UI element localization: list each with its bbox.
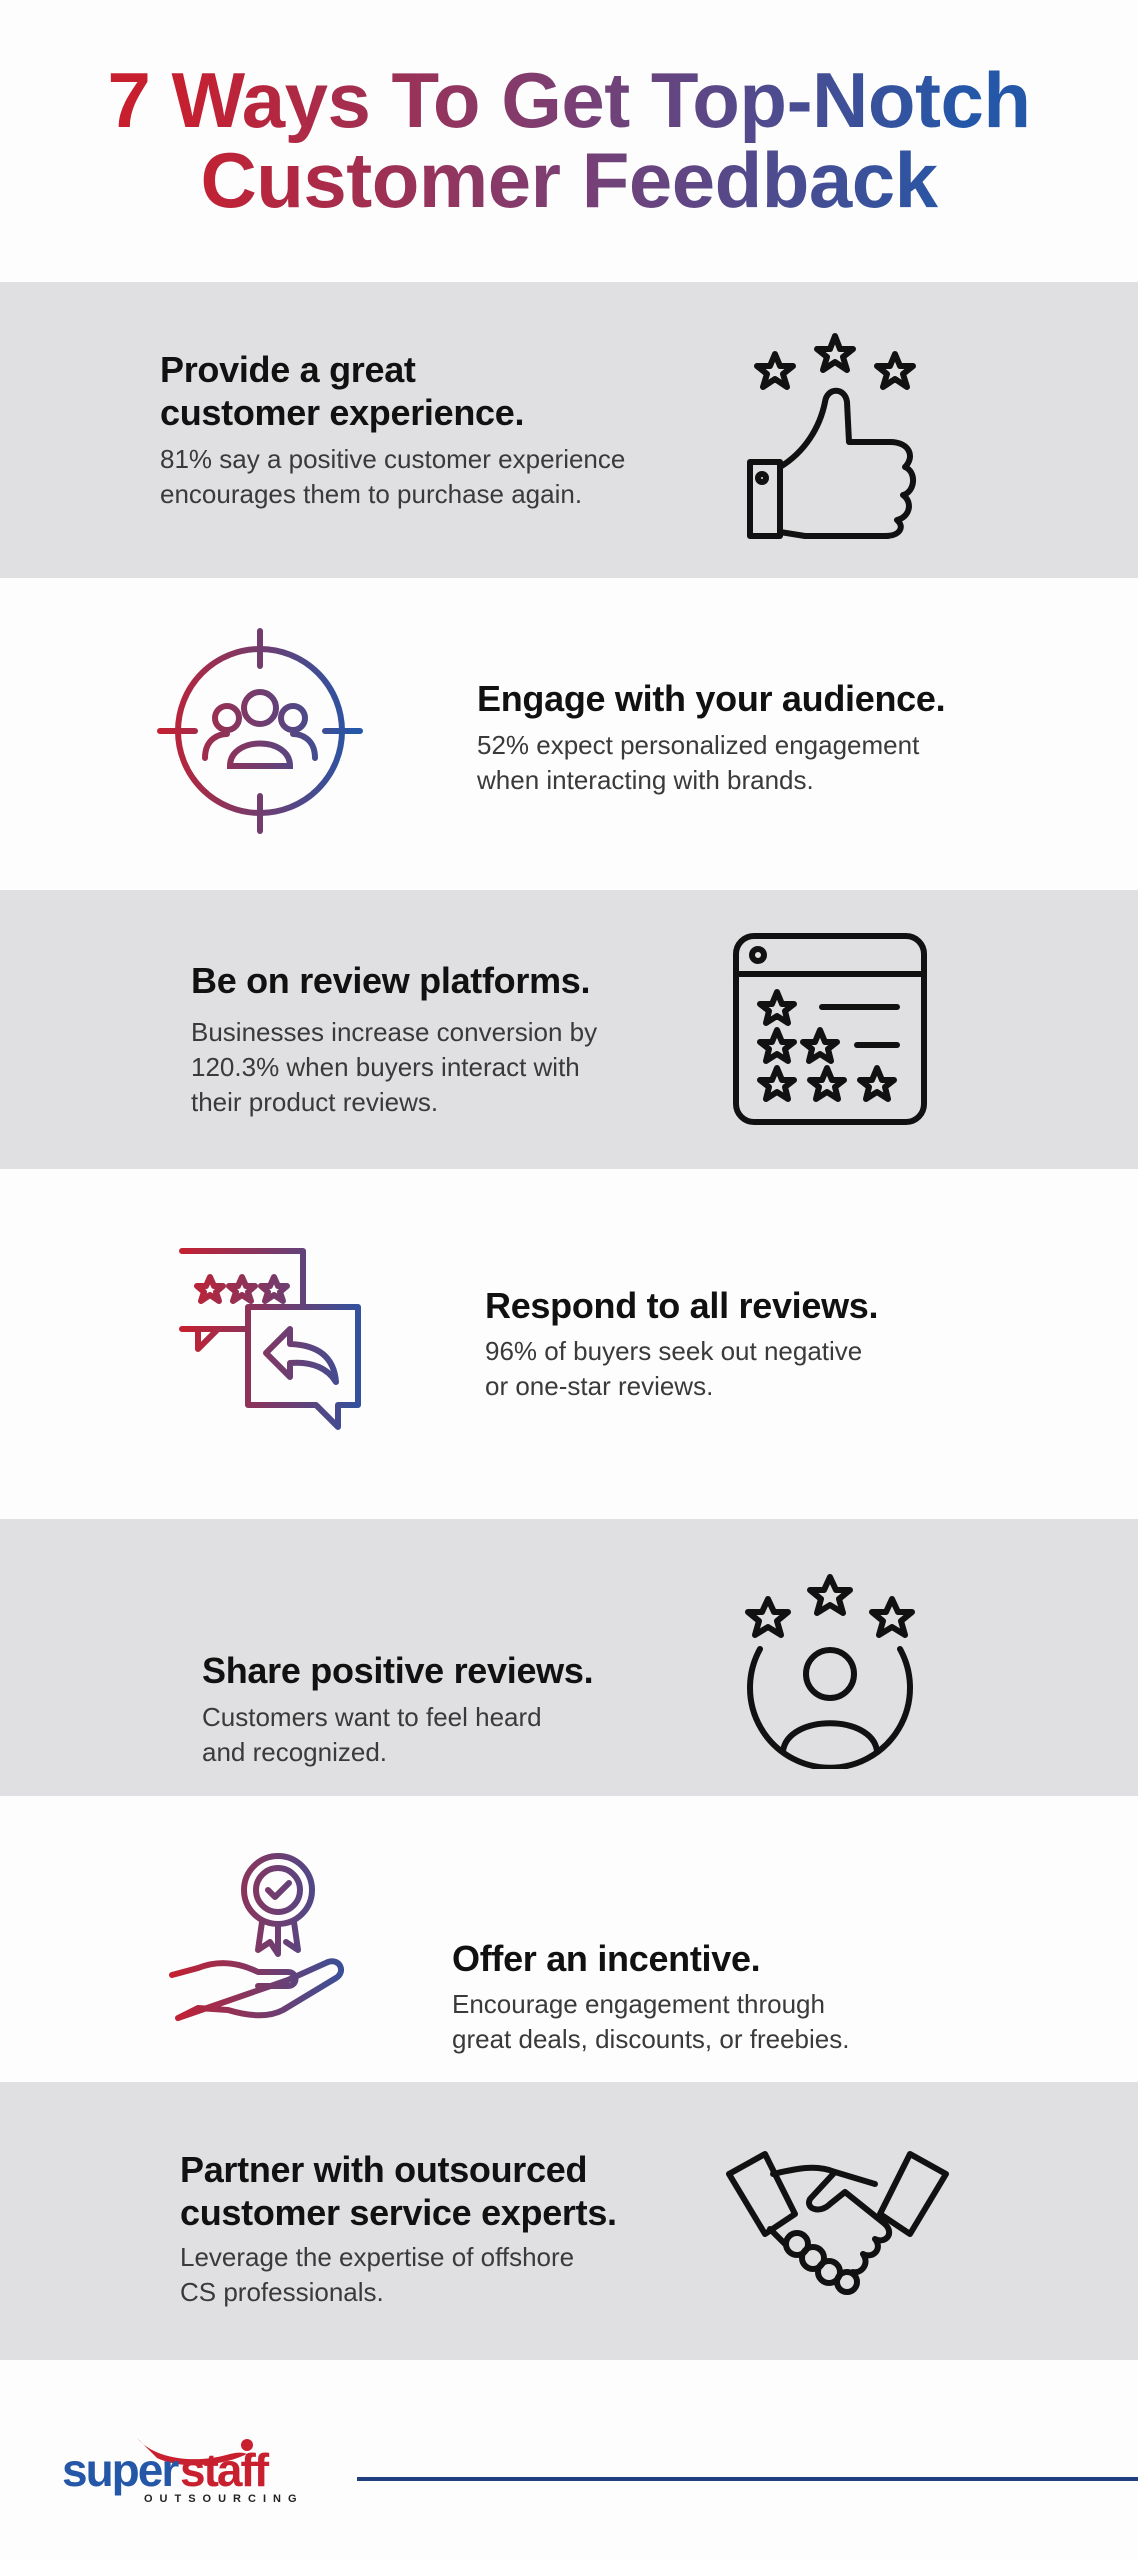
text block: Customers want to feel heard (202, 1702, 542, 1732)
text block (202, 1702, 542, 1767)
text block: encourages them to purchase again. (160, 479, 582, 509)
text block: Encourage engagement through (452, 1989, 825, 2019)
panel: engage (0, 578, 1138, 890)
heading: Partner with outsourced (180, 2149, 587, 2190)
title: 7 Ways To Get Top-Notch (107, 56, 1031, 144)
icon: handshake (726, 2151, 949, 2295)
heading: Respond to all reviews. (485, 1285, 878, 1326)
heading: Share positive reviews. (202, 1650, 593, 1691)
title: Customer Feedback (200, 136, 938, 224)
heading: Offer an incentive. (452, 1938, 760, 1979)
heading (160, 349, 524, 433)
text block (160, 444, 625, 509)
text block: or one-star reviews. (485, 1371, 713, 1401)
icon: target with group (157, 628, 363, 834)
heading: Provide a great (160, 349, 416, 390)
icon: thumbs up with stars (747, 333, 916, 539)
panel: review platforms (0, 890, 1138, 1169)
title (0, 60, 1138, 220)
text block: Leverage the expertise of offshore (180, 2242, 574, 2272)
text block (180, 2242, 574, 2307)
text block: 96% of buyers seek out negative (485, 1336, 862, 1366)
text block: and recognized. (202, 1737, 387, 1767)
logo: superstaff (62, 2438, 304, 2505)
icon: person with stars (745, 1574, 915, 1769)
heading: customer service experts. (180, 2192, 617, 2233)
heading: customer experience. (160, 392, 524, 433)
icon: hand with badge (169, 1853, 344, 2022)
text block (485, 1336, 862, 1401)
icon: chat bubbles (179, 1248, 361, 1430)
text block (191, 1017, 597, 1117)
text block: when interacting with brands. (477, 765, 814, 795)
text block: their product reviews. (191, 1087, 438, 1117)
panel: partner (0, 2082, 1138, 2360)
text block (452, 1989, 849, 2054)
heading: Engage with your audience. (477, 678, 945, 719)
text block: Businesses increase conversion by (191, 1017, 597, 1047)
text block: CS professionals. (180, 2277, 384, 2307)
panel: customer experience (0, 282, 1138, 578)
text block: 52% expect personalized engagement (477, 730, 919, 760)
panel: respond (0, 1169, 1138, 1519)
text block: 81% say a positive customer experience (160, 444, 625, 474)
logo: superstaff: OUTSOURCING (144, 2493, 304, 2505)
logo: superstaff: super (62, 2444, 179, 2496)
panel: share (0, 1519, 1138, 1796)
text block: 120.3% when buyers interact with (191, 1052, 580, 1082)
divider line (357, 2477, 1138, 2481)
text block (477, 730, 920, 795)
heading: Be on review platforms. (191, 960, 590, 1001)
panel: incentive (0, 1796, 1138, 2082)
icon: browser with stars (733, 933, 927, 1125)
logo: superstaff: staff (180, 2444, 270, 2496)
text block: great deals, discounts, or freebies. (452, 2024, 849, 2054)
heading (180, 2149, 617, 2233)
